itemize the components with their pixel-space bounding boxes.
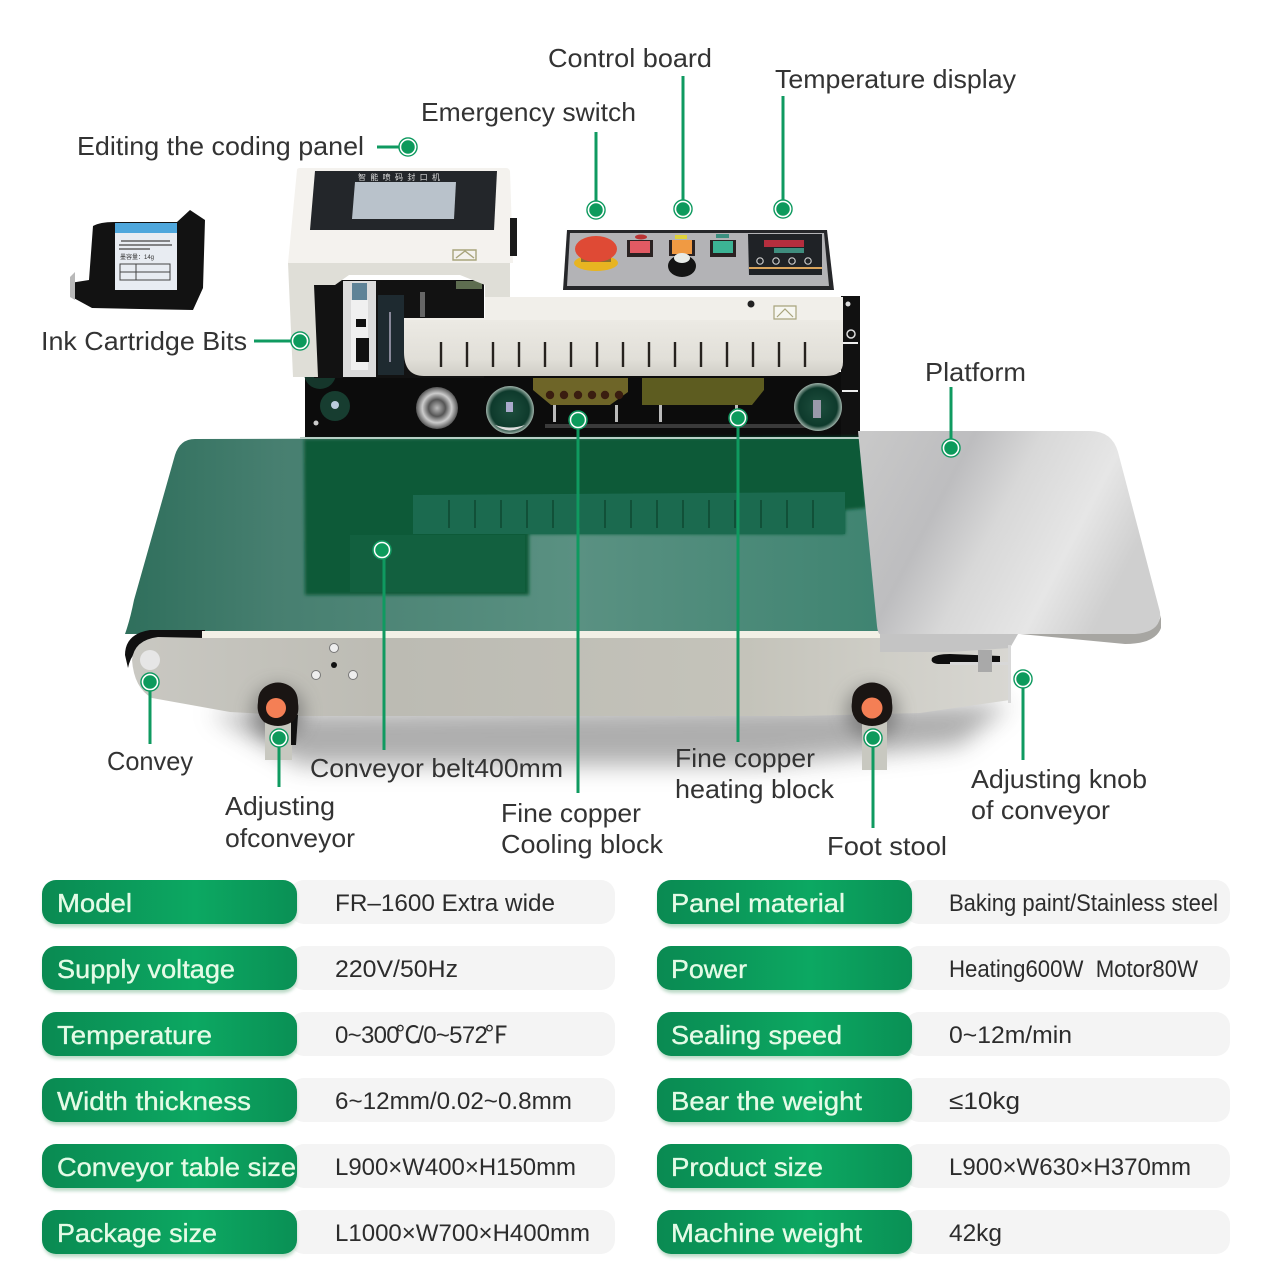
control board xyxy=(563,230,834,290)
right knob and leg xyxy=(846,682,898,770)
row: Power: Power xyxy=(671,954,747,984)
callout: Emergency switch: Emergency switch xyxy=(421,97,636,127)
cartridge label xyxy=(115,223,177,290)
row: Machine weight xyxy=(657,1210,1230,1257)
fine copper heating block xyxy=(642,378,764,422)
panel title: 智能喷码封口机 xyxy=(358,172,440,182)
callout: Control board xyxy=(548,43,712,218)
row: Conveyor table size: Conveyor table size xyxy=(57,1152,296,1182)
conveyor roller xyxy=(125,630,205,668)
row: Model: Model xyxy=(57,888,132,918)
callout: Control board: Control board xyxy=(548,43,712,73)
callout: Temperature display: Temperature display xyxy=(775,64,1016,94)
callout: Fine copper heating block: Fine copper xyxy=(675,743,815,773)
orange switch xyxy=(669,235,695,256)
cream front housing xyxy=(288,263,510,377)
row: Supply voltage xyxy=(42,946,615,993)
cartridge label table xyxy=(120,264,170,280)
row: Package size xyxy=(42,1210,615,1257)
upper coding housing xyxy=(288,168,517,263)
callout: Foot stool: Foot stool xyxy=(827,831,947,861)
speed knob xyxy=(668,253,696,277)
specification table: right column xyxy=(657,880,1230,1257)
callout: Emergency switch xyxy=(421,97,636,219)
row: Sealing speed: 0~12m/min xyxy=(949,1022,1072,1049)
row: Package size: Package size xyxy=(57,1218,217,1248)
callout: Fine copper heating block: heating block xyxy=(675,774,835,804)
editing panel xyxy=(310,171,497,230)
callout: Convey: Convey xyxy=(107,746,193,776)
temperature display xyxy=(748,234,822,275)
row: Model xyxy=(42,880,615,927)
stainless steel platform xyxy=(858,431,1161,644)
row: Panel material: Baking paint/Stainless steel xyxy=(949,890,1218,917)
roller screw xyxy=(140,650,160,670)
row: Model: FR–1600 Extra wide xyxy=(335,890,555,917)
slotted heater cover xyxy=(404,300,843,376)
row: Sealing speed xyxy=(657,1012,1230,1059)
row: Temperature: 0~300℃/0~572℉ xyxy=(335,1022,507,1049)
row: Sealing speed: Sealing speed xyxy=(671,1020,842,1050)
callout: Fine copper Cooling block: Fine copper xyxy=(501,798,641,828)
callout: Foot stool xyxy=(827,729,947,861)
callout: Adjusting knob of conveyor xyxy=(971,670,1147,825)
row: Machine weight: 42kg xyxy=(949,1220,1002,1247)
callout: Conveyor belt: Conveyor belt400mm xyxy=(310,753,563,783)
callout: Editing the coding panel: Editing the coding panel xyxy=(77,131,364,161)
rocker switch xyxy=(510,218,517,256)
machine floor shadow xyxy=(210,704,1010,765)
cartridge metal contact xyxy=(70,272,75,300)
row: Power xyxy=(657,946,1230,993)
emergency stop button xyxy=(574,236,618,271)
callout: Convey xyxy=(107,673,193,776)
row: Bear the weight: Bear the weight xyxy=(671,1086,863,1116)
belt white edge xyxy=(202,631,882,639)
machine black back frame xyxy=(305,296,860,438)
machine illustration xyxy=(125,168,1161,770)
callout: Temperature display xyxy=(774,64,1016,218)
conveyor side rail xyxy=(132,637,1010,716)
callout: Adjusting knob of conveyor: Adjusting knob xyxy=(971,764,1147,794)
callout: Conveyor belt xyxy=(310,541,563,783)
row: Width thickness: 6~12mm/0.02~0.8mm xyxy=(335,1088,572,1115)
row: Machine weight: Machine weight xyxy=(671,1218,863,1248)
green switch xyxy=(710,234,736,257)
row: Package size: L1000×W700×H400mm xyxy=(335,1220,590,1247)
fine copper cooling block xyxy=(533,378,628,422)
ink cartridge xyxy=(70,210,205,310)
platform bracket and latch xyxy=(880,634,1018,703)
callout: Platform xyxy=(925,357,1026,457)
callout: Fine copper heating block xyxy=(675,409,835,804)
row: Supply voltage: 220V/50Hz xyxy=(335,956,458,983)
cartridge label lines xyxy=(119,241,172,249)
callout: Ink Cartridge Bits: Ink Cartridge Bits xyxy=(41,326,247,356)
specification table: left column xyxy=(42,880,615,1257)
row: Bear the weight: ≤10kg xyxy=(949,1088,1020,1115)
row: Conveyor table size xyxy=(42,1144,615,1191)
touch screen xyxy=(352,182,456,219)
callout: Adjusting ofconveyor xyxy=(225,729,355,853)
printing bay xyxy=(314,280,484,378)
row: Supply voltage: Supply voltage xyxy=(57,954,235,984)
mounting screws xyxy=(312,644,358,680)
row: Panel material: Panel material xyxy=(671,888,845,918)
callout: Adjusting knob of conveyor: of conveyor xyxy=(971,795,1110,825)
cartridge blue strip xyxy=(115,223,177,233)
row: Temperature: Temperature xyxy=(57,1020,212,1050)
warning sticker xyxy=(453,250,476,260)
row: Power: Heating600W Motor80W xyxy=(949,956,1198,983)
row: Product size xyxy=(657,1144,1230,1191)
row: Width thickness xyxy=(42,1078,615,1125)
row: Width thickness: Width thickness xyxy=(57,1086,251,1116)
green conveyor belt xyxy=(125,437,881,634)
row: Bear the weight xyxy=(657,1078,1230,1125)
left knob and leg xyxy=(252,682,304,760)
sealing head top surface xyxy=(404,297,843,323)
red power switch xyxy=(627,234,653,257)
wheels on back frame xyxy=(304,357,842,434)
row: Panel material xyxy=(657,880,1230,927)
callout: Adjusting ofconveyor: Adjusting xyxy=(225,791,335,821)
callout: Fine copper Cooling block: Cooling block xyxy=(501,829,664,859)
row: Product size: Product size xyxy=(671,1152,823,1182)
callout: Platform: Platform xyxy=(925,357,1026,387)
callout: Fine copper Cooling block xyxy=(501,411,664,859)
row: Conveyor table size: L900×W400×H150mm xyxy=(335,1154,576,1181)
callout: Adjusting ofconveyor: ofconveyor xyxy=(225,823,355,853)
row: Temperature xyxy=(42,1012,615,1059)
cartridge label text: 墨容量：14g xyxy=(120,253,154,261)
row: Product size: L900×W630×H370mm xyxy=(949,1154,1191,1181)
